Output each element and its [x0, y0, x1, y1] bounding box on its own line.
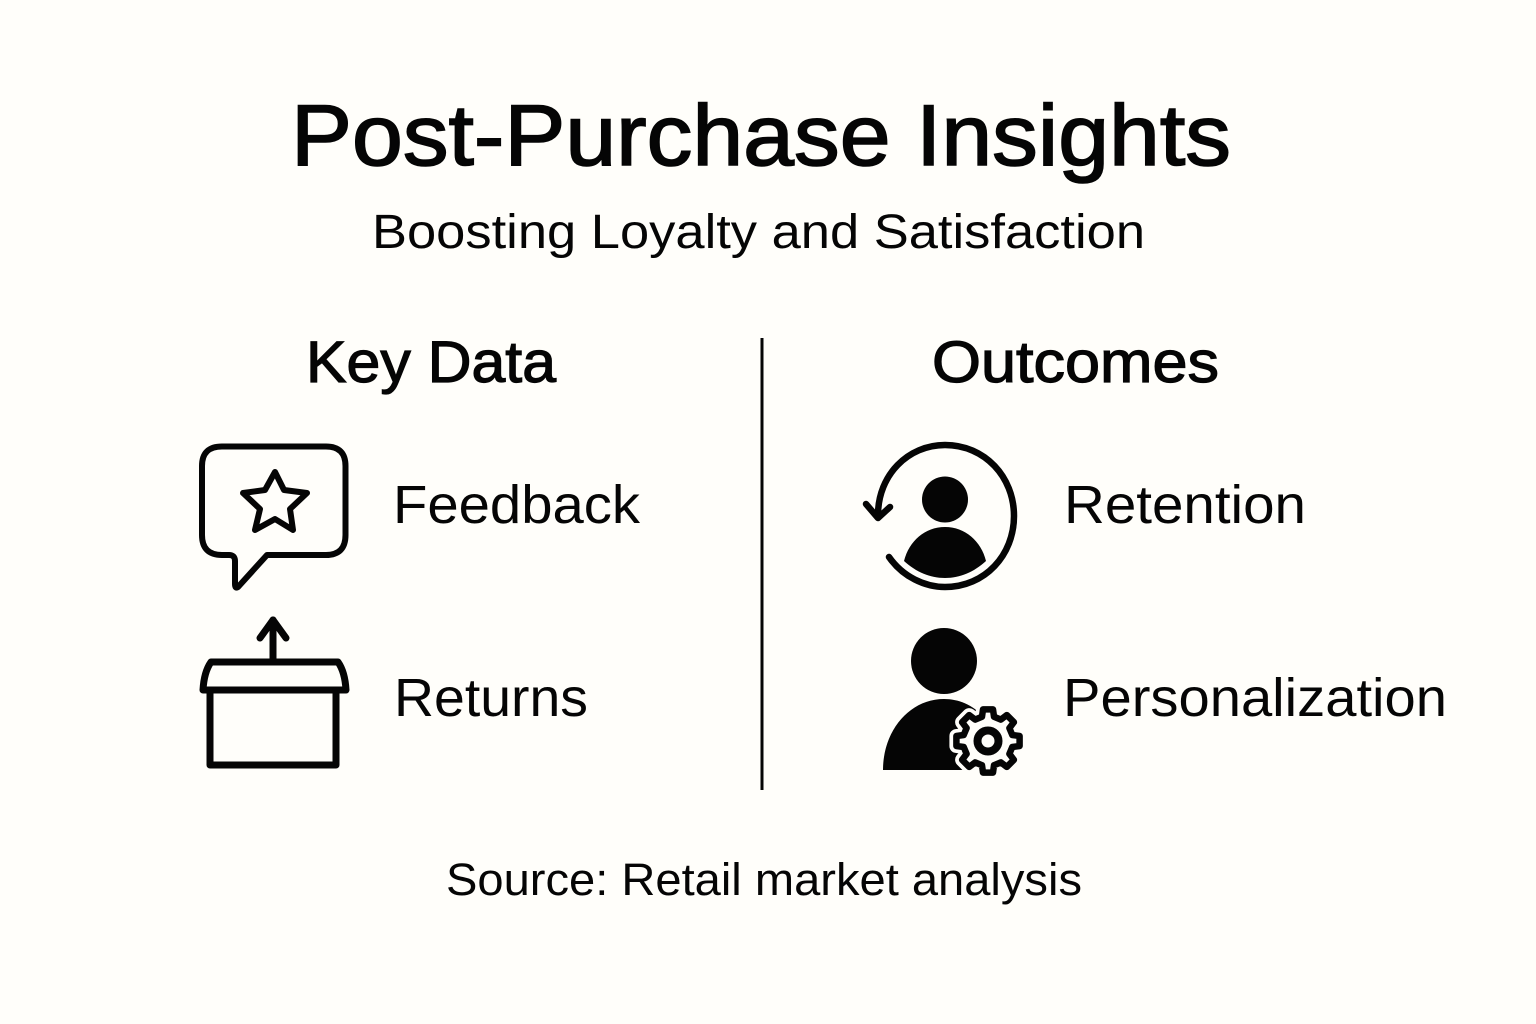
source note: Source: Retail market analysis — [446, 854, 1082, 905]
icon: retention person in circular arrow — [866, 445, 1014, 587]
panel: outcomes — [866, 330, 1447, 773]
icon: personalization person with gear — [883, 628, 1020, 773]
heading: outcomes: Outcomes — [932, 330, 1219, 395]
label: returns: Returns — [394, 668, 588, 728]
icon: returns box with up arrow — [203, 620, 346, 765]
label: feedback: Feedback — [393, 475, 641, 535]
subtitle: Boosting Loyalty and Satisfaction — [372, 206, 1145, 259]
heading: key data: Key Data — [306, 330, 557, 395]
title: Post-Purchase Insights — [291, 88, 1231, 184]
icon: feedback speech bubble with star — [202, 446, 346, 588]
center divider — [760, 338, 764, 790]
panel: key data — [202, 330, 641, 765]
label: personalization: Personalization — [1063, 668, 1447, 728]
label: retention: Retention — [1064, 475, 1306, 535]
